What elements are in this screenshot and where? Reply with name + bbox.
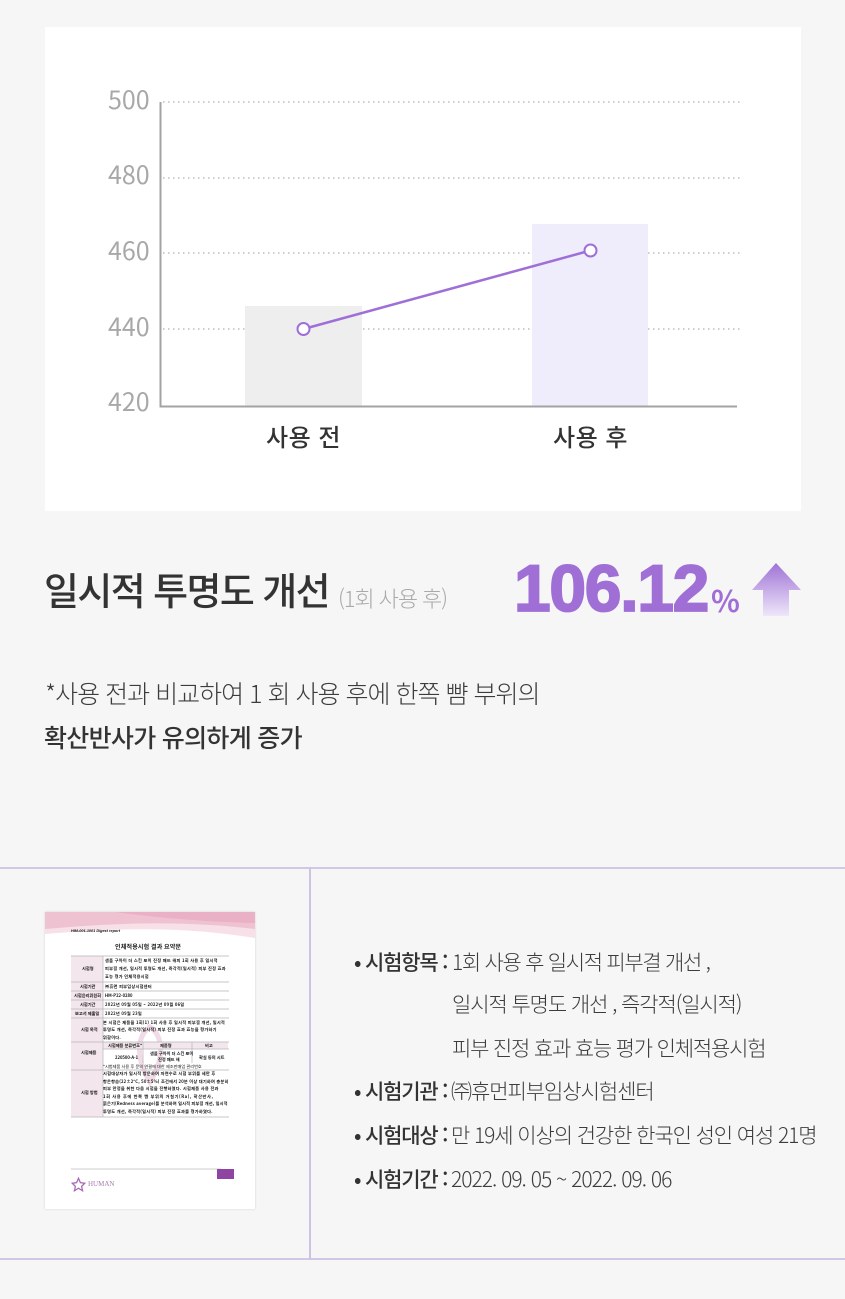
icon: up arrow <box>752 563 801 616</box>
report table labels: ㈜휴먼 피부임상시험센터 <box>105 984 152 990</box>
report table labels: 시험제품 분류번호* <box>108 1043 142 1049</box>
report table labels: 보고서 제출일 <box>75 1011 99 1017</box>
axis label 480: 480 <box>108 156 150 192</box>
report table <box>71 956 234 1179</box>
value: test items line 2: 일시적 투명도 개선 , 즉각적(일시적) <box>452 989 741 1019</box>
panel: chart card <box>45 27 801 511</box>
axis label 440: 440 <box>108 308 150 344</box>
report table labels: 위함이다. <box>103 1035 121 1041</box>
report header text: HIM-001-1001 Digest report <box>71 929 120 933</box>
item: institution: • 시험기관 : <box>354 1076 447 1106</box>
axis label 500: 500 <box>108 81 150 117</box>
item: period: • 시험기간 : <box>354 1164 447 1194</box>
description line 2: 확산반사가 유의하게 증가 <box>44 719 302 755</box>
report table labels: 진정 패드 해 <box>158 1057 180 1063</box>
value: test items line 1: 1회 사용 후 일시적 피부결 개선 , <box>452 947 710 977</box>
report table labels: *시험제품 사용 후 문의 연결에 대한 제조판매업 관리번호 <box>103 1064 202 1070</box>
report table labels: 투명도 개선, 즉각적(일시적) 피부 진정 효과를 평가하였다. <box>103 1109 213 1115</box>
report table labels: 시험대상자가 일시적 방문하여 자연수로 시험 부위를 세안 후 <box>103 1071 216 1077</box>
report table labels: 투명도 개선, 즉각적(일시적) 피부 진정 효과 효능을 평가하기 <box>103 1027 217 1033</box>
report table labels: 제품명 <box>160 1043 172 1049</box>
report table labels: 시험 목적 <box>81 1027 98 1033</box>
report table labels: 시험명 <box>82 966 94 972</box>
bar: after use <box>532 224 648 406</box>
report table labels: 2022년 09월 23일 <box>105 1011 142 1017</box>
report table labels: 시험기관 <box>80 984 95 990</box>
logo text: HUMAN <box>88 1180 114 1188</box>
report table labels: 2022년 09월 05일 ~ 2022년 09월 06일 <box>105 1002 184 1008</box>
test details list <box>354 947 817 1194</box>
report table labels: 시험제품 <box>81 1050 96 1056</box>
report table labels <box>74 958 229 1115</box>
heading note: (1회 사용 후) <box>338 582 447 614</box>
report table labels: 시험 방법 <box>81 1090 98 1096</box>
item: subjects: • 시험대상 : <box>354 1120 447 1150</box>
bar: before use <box>245 306 362 406</box>
report table labels: HM-P22-0280 <box>105 993 132 999</box>
item: test items: • 시험항목 : <box>354 947 447 977</box>
report table labels: 피부 안정을 취한 다음 시험을 진행하였다. 시험제품 사용 전과 <box>103 1086 219 1092</box>
value: test items line 3: 피부 진정 효과 효능 평가 인체적용시험 <box>452 1033 765 1063</box>
report document thumbnail <box>45 912 255 1209</box>
percent sign: % <box>711 577 739 621</box>
report table labels: 피부결 개선, 일시적 투명도 개선, 즉각적(일시적) 피부 진정 효과 <box>105 966 226 972</box>
report table labels: 1회 사용 후에 한쪽 뺨 부위의 거칠기(Ra), 확산반사, <box>103 1094 213 1100</box>
report table labels: 시험기간 <box>80 1002 95 1008</box>
category label: before: 사용 전 <box>266 418 341 453</box>
value: period: 2022. 09. 05 ~ 2022. 09. 06 <box>451 1164 671 1194</box>
axis label 420: 420 <box>108 383 150 419</box>
description line 1: *사용 전과 비교하여 1 회 사용 후에 한쪽 뺨 부위의 <box>45 675 539 711</box>
report table labels: 220500-A-1 <box>115 1055 138 1061</box>
axis label 460: 460 <box>108 232 150 268</box>
report watermark <box>137 1024 163 1086</box>
category label: after: 사용 후 <box>553 418 628 453</box>
report table labels: 비고 <box>205 1043 213 1049</box>
report table labels: 시험윤리위원회 <box>74 993 101 999</box>
report table labels: 샘플 구아이 더 스킨 포이 <box>150 1051 193 1057</box>
report table labels: 샘플 구아이 더 스킨 포이 진정 패드 해피 1회 사용 후 일시적 <box>105 958 218 964</box>
report table labels: 효능 평가 인체적용시험 <box>105 974 149 980</box>
heading: 일시적 투명도 개선 <box>44 561 329 616</box>
icon: human logo <box>71 1177 86 1192</box>
value: subjects: 만 19세 이상의 건강한 한국인 성인 여성 21명 <box>451 1120 817 1150</box>
report table labels: 본 시험은 제품을 1회(1) 1회 사용 후 일시적 피부결 개선, 일시적 <box>103 1020 225 1026</box>
report title: 인체적용시험 결과 요약문 <box>115 942 181 951</box>
report header band <box>45 912 255 938</box>
report table labels: 붉은기(Redness average)를 분석하여 일시적 피부결 개선, 일시적 <box>103 1101 228 1107</box>
bar chart <box>160 101 740 408</box>
report table labels: 확실 동의 시트 <box>199 1055 224 1061</box>
value: institution: ㈜휴먼피부임상시험센터 <box>451 1076 654 1106</box>
axes <box>160 102 737 406</box>
line series <box>298 244 596 335</box>
panel: test information <box>0 867 845 1260</box>
big number: 106.12 <box>514 551 708 625</box>
report table labels: 항온항습(22±2°C, 50±5%) 조건에서 20분 이상 대기하여 충분히 <box>103 1079 229 1085</box>
